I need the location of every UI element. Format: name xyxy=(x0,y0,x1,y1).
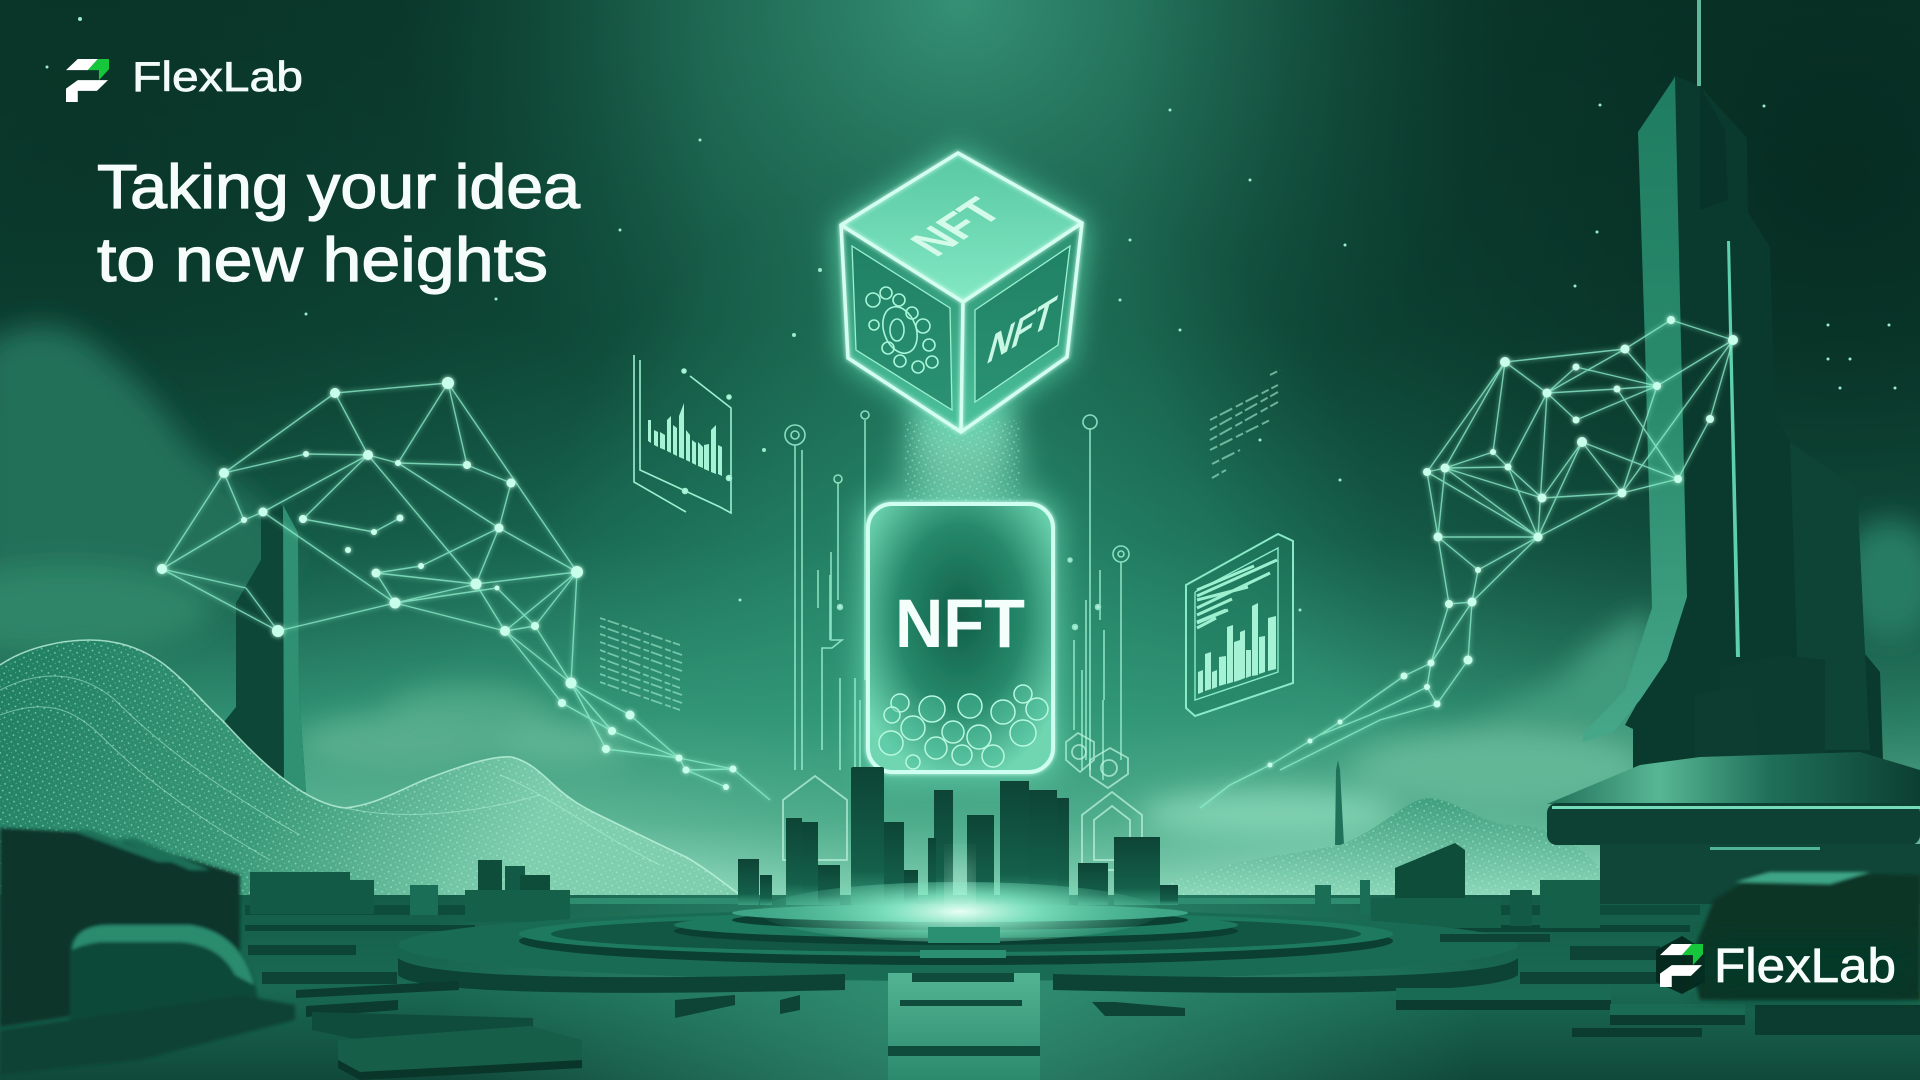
headline xyxy=(97,153,581,295)
cube glow xyxy=(835,148,1088,438)
ring one top xyxy=(519,912,1393,956)
logo mark xyxy=(66,59,109,102)
card body xyxy=(868,504,1053,772)
network left xyxy=(157,377,770,800)
cube edges xyxy=(841,153,1082,432)
inner panels xyxy=(852,246,1070,410)
ground floor xyxy=(0,895,1920,1080)
right city skyline xyxy=(1315,843,1600,928)
top NFT label: NFT xyxy=(899,190,1014,264)
network right xyxy=(1200,316,1738,808)
ring two wall xyxy=(674,917,1238,945)
clouds left xyxy=(0,326,630,775)
base dome xyxy=(1547,752,1920,806)
headline: Taking your idea xyxy=(97,153,581,222)
ring three top xyxy=(732,904,1188,922)
left face xyxy=(841,225,963,432)
light rod xyxy=(1727,241,1740,657)
data readout right xyxy=(1210,370,1280,478)
stars xyxy=(46,17,1896,612)
left city skyline xyxy=(250,860,570,922)
gear artwork xyxy=(866,287,938,373)
clouds right xyxy=(1140,520,1920,840)
circuit pins xyxy=(785,411,1129,780)
ring three wall xyxy=(732,910,1188,930)
logo wordmark: FlexLab xyxy=(132,53,303,100)
ring one wall xyxy=(519,917,1393,965)
outer base rim left xyxy=(398,958,845,993)
floating chart right xyxy=(1186,534,1293,716)
right mountains and far spire xyxy=(1165,760,1610,900)
base ring xyxy=(1547,803,1920,845)
card glow xyxy=(860,497,1060,779)
logo bottom right xyxy=(1656,936,1912,994)
tower body xyxy=(1625,75,1883,770)
NFT cube xyxy=(835,148,1088,438)
center walkway xyxy=(888,973,1040,1080)
steps xyxy=(928,927,1000,943)
left distant spire xyxy=(224,503,306,792)
logo wordmark: FlexLab xyxy=(1714,940,1896,993)
logo top left xyxy=(66,53,303,102)
floor blocks xyxy=(248,934,1920,1080)
right NFT label: NFT xyxy=(982,286,1061,374)
card NFT tokens xyxy=(879,685,1048,769)
left mountains xyxy=(0,640,740,900)
dark backing for wordmark xyxy=(1706,938,1912,992)
headline: to new heights xyxy=(97,226,548,295)
light beam xyxy=(890,400,1035,510)
outer base surface xyxy=(398,909,1518,981)
central platform xyxy=(398,860,1518,993)
pad glow xyxy=(760,882,1160,942)
NFT card xyxy=(860,497,1060,779)
data readout left xyxy=(600,618,682,710)
horizon ledges xyxy=(245,898,1700,932)
floating chart left xyxy=(634,355,732,513)
central city xyxy=(738,767,1178,905)
ring two top xyxy=(674,912,1238,938)
foreground right block xyxy=(1690,872,1920,1000)
outer base rim right xyxy=(1053,958,1518,993)
foreground left block xyxy=(0,828,295,1075)
hexagon backing xyxy=(1656,936,1705,994)
pedestal xyxy=(1600,844,1920,904)
right tower xyxy=(1547,0,1920,904)
card label: NFT xyxy=(895,585,1025,662)
hexagon glyphs xyxy=(783,733,1142,870)
logo mark xyxy=(1660,944,1703,987)
top face xyxy=(841,153,1082,302)
tower steps xyxy=(1720,655,1825,760)
right face xyxy=(961,223,1082,432)
tower curved face xyxy=(1583,77,1687,742)
antenna xyxy=(1697,0,1701,86)
